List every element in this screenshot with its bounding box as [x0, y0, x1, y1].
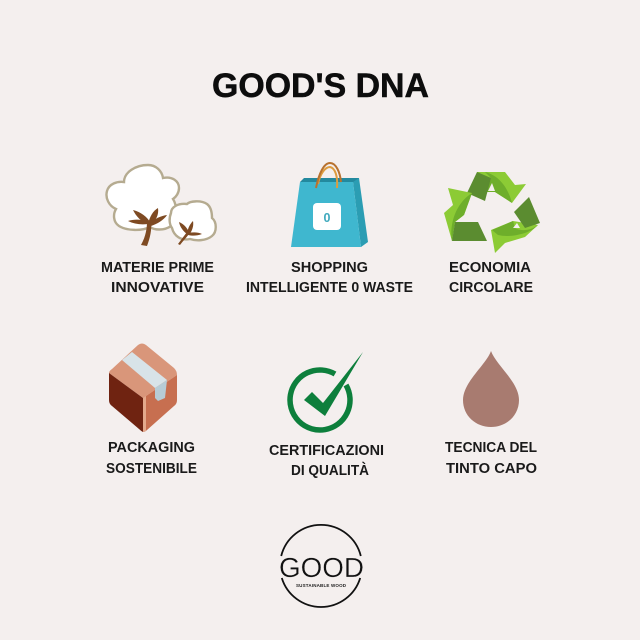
panel: shopping intelligente [246, 163, 413, 296]
label: PACKAGING [108, 440, 195, 456]
icon: tape [122, 352, 167, 401]
label: TINTO CAPO [446, 461, 537, 477]
label [101, 260, 214, 296]
label [246, 260, 413, 296]
panel: tecnica del tinto capo [445, 351, 537, 477]
label: MATERIE PRIME [101, 260, 214, 276]
label [449, 260, 533, 296]
label: CIRCOLARE [449, 280, 533, 296]
icon: shopping bag [291, 163, 368, 247]
arrow top [467, 172, 526, 203]
arrow right [491, 197, 540, 253]
label [106, 440, 197, 477]
label: ECONOMIA [449, 260, 532, 276]
panel: certificazioni di qualita [269, 352, 384, 479]
icon: drop [463, 351, 519, 427]
icon: recycle [444, 172, 540, 253]
icon: cotton stem small [178, 221, 202, 245]
logo [279, 525, 364, 607]
label: TECNICA DEL [445, 440, 537, 456]
icon: zero badge: 0 [324, 211, 331, 225]
label: INTELLIGENTE 0 WASTE [246, 280, 413, 296]
icon: check in circle [290, 352, 363, 430]
label: INNOVATIVE [111, 280, 204, 296]
panel: economia circolare [444, 172, 540, 296]
label: DI QUALITÀ [291, 462, 369, 479]
icon: cotton [106, 165, 216, 246]
icon: box [109, 344, 177, 432]
label [445, 440, 537, 477]
logo tagline: SUSTAINABLE WOOD [296, 583, 347, 588]
panel: materie prime innovative [101, 165, 216, 296]
label: CERTIFICAZIONI [269, 443, 384, 459]
label: SHOPPING [291, 260, 368, 276]
icon: cotton stem large [128, 208, 167, 246]
arrow left [444, 188, 487, 241]
logo wordmark: GOOD [279, 552, 364, 583]
title: GOOD'S DNA [212, 67, 429, 105]
panel: packaging sostenibile [106, 344, 197, 477]
label [269, 443, 384, 479]
logo ring [281, 525, 361, 607]
label: SOSTENIBILE [106, 461, 197, 477]
